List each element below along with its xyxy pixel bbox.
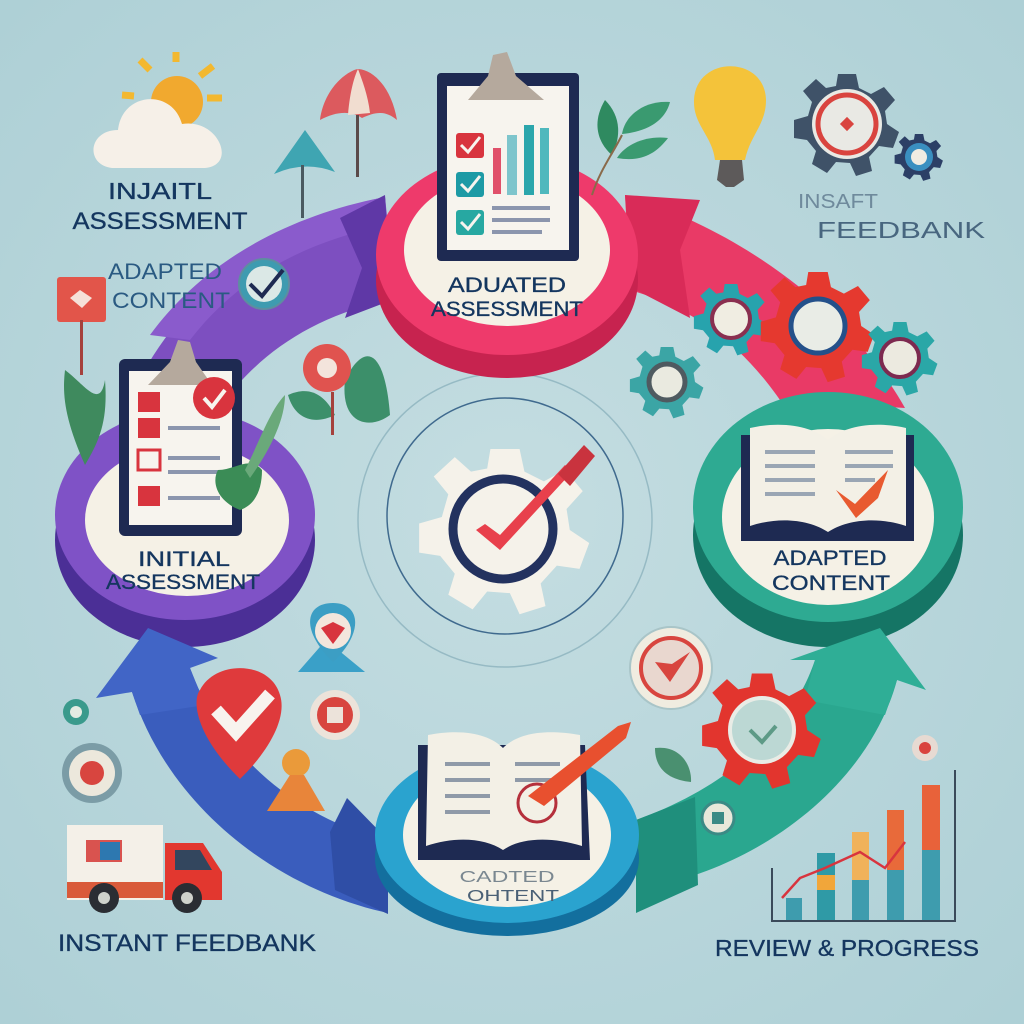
- step: initial assessment (left, purple ring): ASSESSMENT: [106, 571, 260, 594]
- icon: location pin center bottom: [298, 603, 365, 672]
- text: adapted content left: [108, 259, 230, 313]
- label: ADAPTED: [774, 547, 886, 570]
- icon: red gear: [761, 272, 874, 382]
- step: content (bottom, blue ring): OHTENT: [467, 888, 559, 905]
- text: adapted content left: CONTENT: [112, 288, 230, 313]
- label: CADTED: [460, 869, 554, 886]
- arrow: blue bottom to left: [132, 668, 388, 914]
- step: content (bottom, blue ring): [375, 722, 639, 936]
- arrow: teal bottom to right: [636, 660, 897, 913]
- open book and pen: [418, 722, 631, 860]
- icon: small gear top right: [895, 134, 943, 181]
- text: instant feedback top right: INSAFT: [798, 191, 878, 213]
- center circle ring: [358, 373, 652, 667]
- icon: red umbrella: [320, 69, 397, 177]
- icon: heart badge: [630, 627, 712, 709]
- icon: round badge left: [62, 743, 122, 803]
- icon: small leaf badge left: [63, 699, 89, 725]
- icon: floating teal gear: [630, 347, 703, 418]
- icon: person orange: [267, 749, 325, 811]
- label: ADUATED: [448, 274, 566, 297]
- text: initial assessment top: INJAITL: [108, 178, 212, 204]
- icon: red check pin: [197, 668, 282, 779]
- step: adapted content (right, teal ring): [693, 392, 963, 647]
- icon: delivery truck: [67, 825, 222, 913]
- arrow: purple initial assessment to adapted assessment: [105, 195, 392, 470]
- icon: badge red: [310, 690, 360, 740]
- icon: teal gear: [694, 284, 767, 355]
- icon: teal umbrella: [274, 130, 335, 218]
- icon: leaves top: [592, 100, 670, 195]
- text: adapted content left: ADAPTED: [108, 259, 222, 284]
- label: INITIAL: [138, 548, 230, 571]
- bar chart: [772, 770, 955, 921]
- icon: cloud and sun: [93, 52, 222, 168]
- arrowhead: teal: [790, 628, 926, 715]
- icon: red flag sign: [57, 277, 106, 375]
- center gear with check: [419, 445, 595, 614]
- step: adapted content (right, teal ring): CONTENT: [772, 572, 890, 595]
- step: adapted assessment (top, pink ring): ASSESSMENT: [431, 298, 583, 321]
- icon: leaf: [655, 748, 691, 782]
- text: instant feedback top right: [798, 191, 986, 243]
- step: initial assessment (left, purple ring): [55, 340, 315, 647]
- open book: [741, 425, 914, 541]
- icon: plant near clipboard: [215, 395, 285, 510]
- clipboard: [119, 340, 242, 536]
- icon: small red marker: [912, 735, 938, 761]
- icon: light bulb: [694, 66, 766, 187]
- icon: teal gear right: [862, 322, 937, 395]
- step: adapted assessment (top, pink ring): [376, 52, 638, 378]
- text: initial assessment top: ASSESSMENT: [72, 208, 248, 235]
- icon: left plant: [64, 370, 106, 465]
- icon: pin with leaves: [288, 344, 390, 435]
- icon: small badge: [702, 802, 734, 834]
- icon: red gear bottom right: [702, 674, 821, 789]
- arrow: pink adapted assessment to adapted content: [625, 195, 905, 408]
- icon: large gear top right: [794, 74, 899, 176]
- clipboard: [437, 52, 579, 261]
- text: instant feedback bottom left: INSTANT FEEDBANK: [58, 930, 316, 957]
- text: review and progress: REVIEW & PROGRESS: [715, 935, 979, 961]
- text: instant feedback top right: FEEDBANK: [817, 217, 986, 243]
- icon: check badge: [239, 259, 289, 309]
- text: initial assessment top: [72, 178, 248, 235]
- gears cluster on pink arrow: [630, 272, 937, 418]
- arrowhead: blue: [96, 628, 218, 715]
